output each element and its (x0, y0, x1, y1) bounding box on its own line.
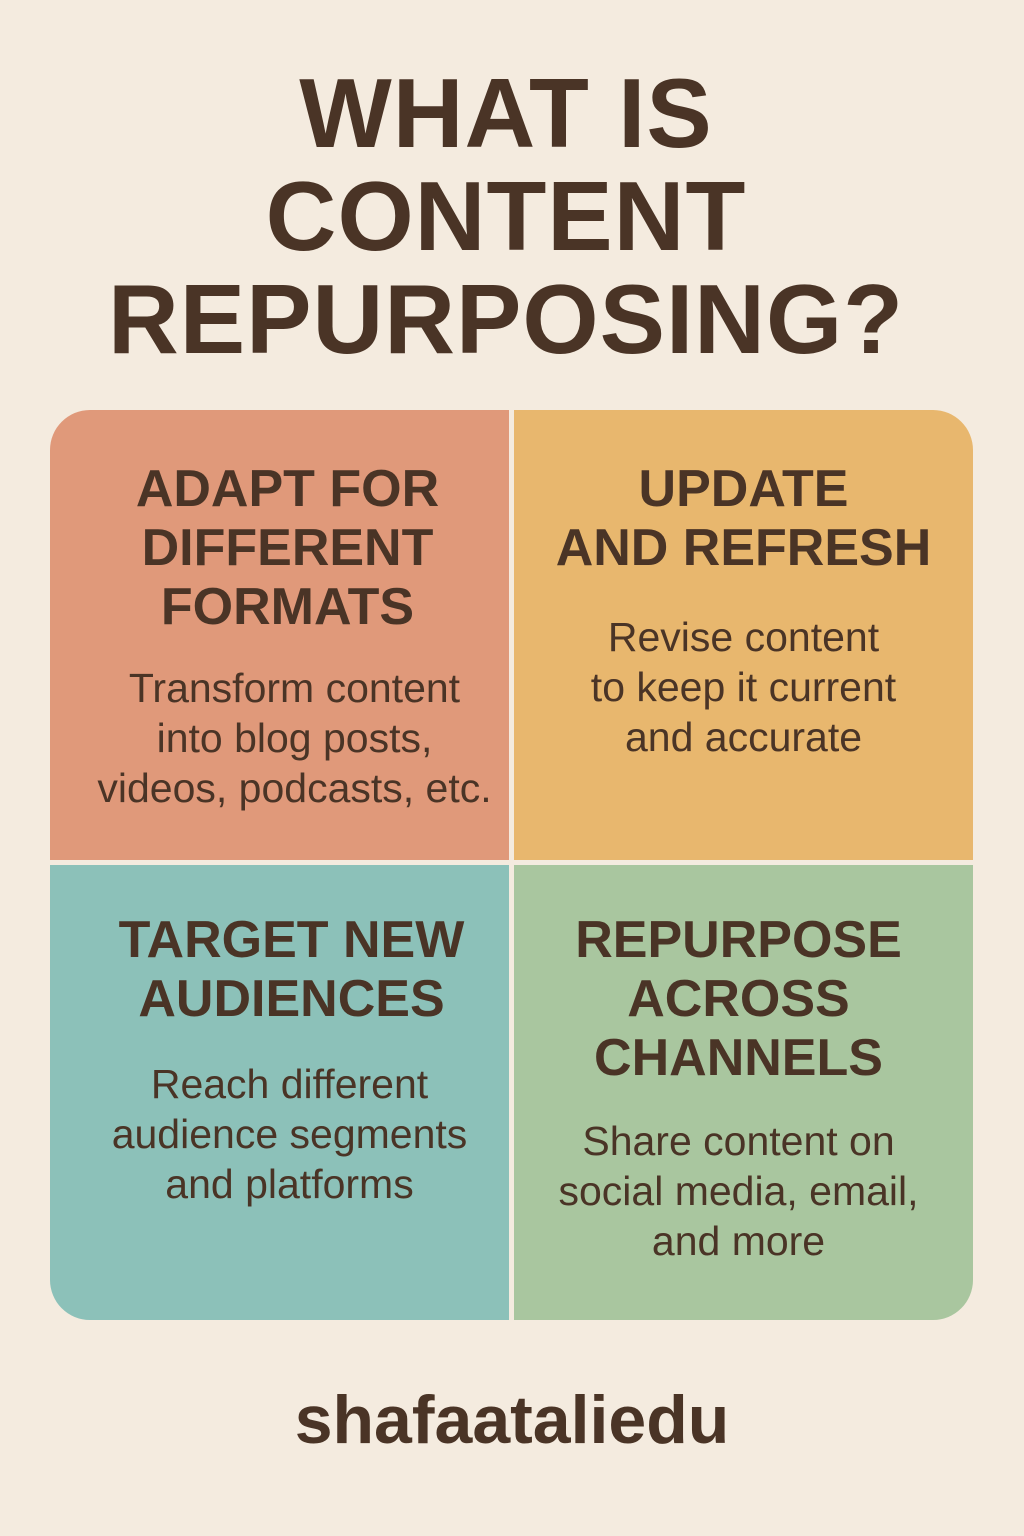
panel: adapt for different formats (50, 410, 509, 860)
footer brand: shafaataliedu (295, 1382, 729, 1458)
text: repurpose (558, 1118, 919, 1264)
text: adapt: into blog posts, (157, 715, 432, 761)
panel: repurpose across channels (514, 865, 973, 1320)
text: target: audience segments (112, 1111, 467, 1157)
text: repurpose: Share content on (582, 1118, 895, 1164)
grid of four panels (50, 410, 973, 1320)
heading: repurpose: ACROSS (627, 970, 850, 1028)
heading: update: AND REFRESH (556, 519, 931, 577)
heading: repurpose (575, 911, 902, 1087)
text: update: Revise content (608, 614, 879, 660)
text: update (591, 614, 896, 760)
text: target: and platforms (165, 1161, 414, 1207)
panel: update and refresh (514, 410, 973, 860)
heading: repurpose: REPURPOSE (575, 911, 902, 969)
text: update: and accurate (625, 714, 862, 760)
text: target (112, 1061, 467, 1207)
heading: adapt (136, 460, 439, 636)
title: WHAT IS (299, 58, 713, 168)
heading: adapt: DIFFERENT (142, 519, 433, 577)
text: repurpose: and more (652, 1218, 825, 1264)
text: target: Reach different (151, 1061, 428, 1107)
text: repurpose: social media, email, (558, 1168, 919, 1214)
title: CONTENT (266, 161, 746, 271)
panel: target new audiences (50, 865, 509, 1320)
title: REPURPOSING? (108, 264, 904, 374)
text: adapt: videos, podcasts, etc. (97, 765, 492, 811)
heading: target: AUDIENCES (138, 970, 445, 1028)
heading: adapt: FORMATS (161, 578, 414, 636)
heading: adapt: ADAPT FOR (136, 460, 439, 518)
title (108, 58, 904, 374)
text: update: to keep it current (591, 664, 896, 710)
heading: repurpose: CHANNELS (594, 1029, 883, 1087)
text: adapt: Transform content (129, 665, 460, 711)
heading: update: UPDATE (639, 460, 848, 518)
heading: target: TARGET NEW (119, 911, 464, 969)
heading: update (556, 460, 931, 577)
heading: target (119, 911, 464, 1028)
text: adapt (97, 665, 492, 811)
